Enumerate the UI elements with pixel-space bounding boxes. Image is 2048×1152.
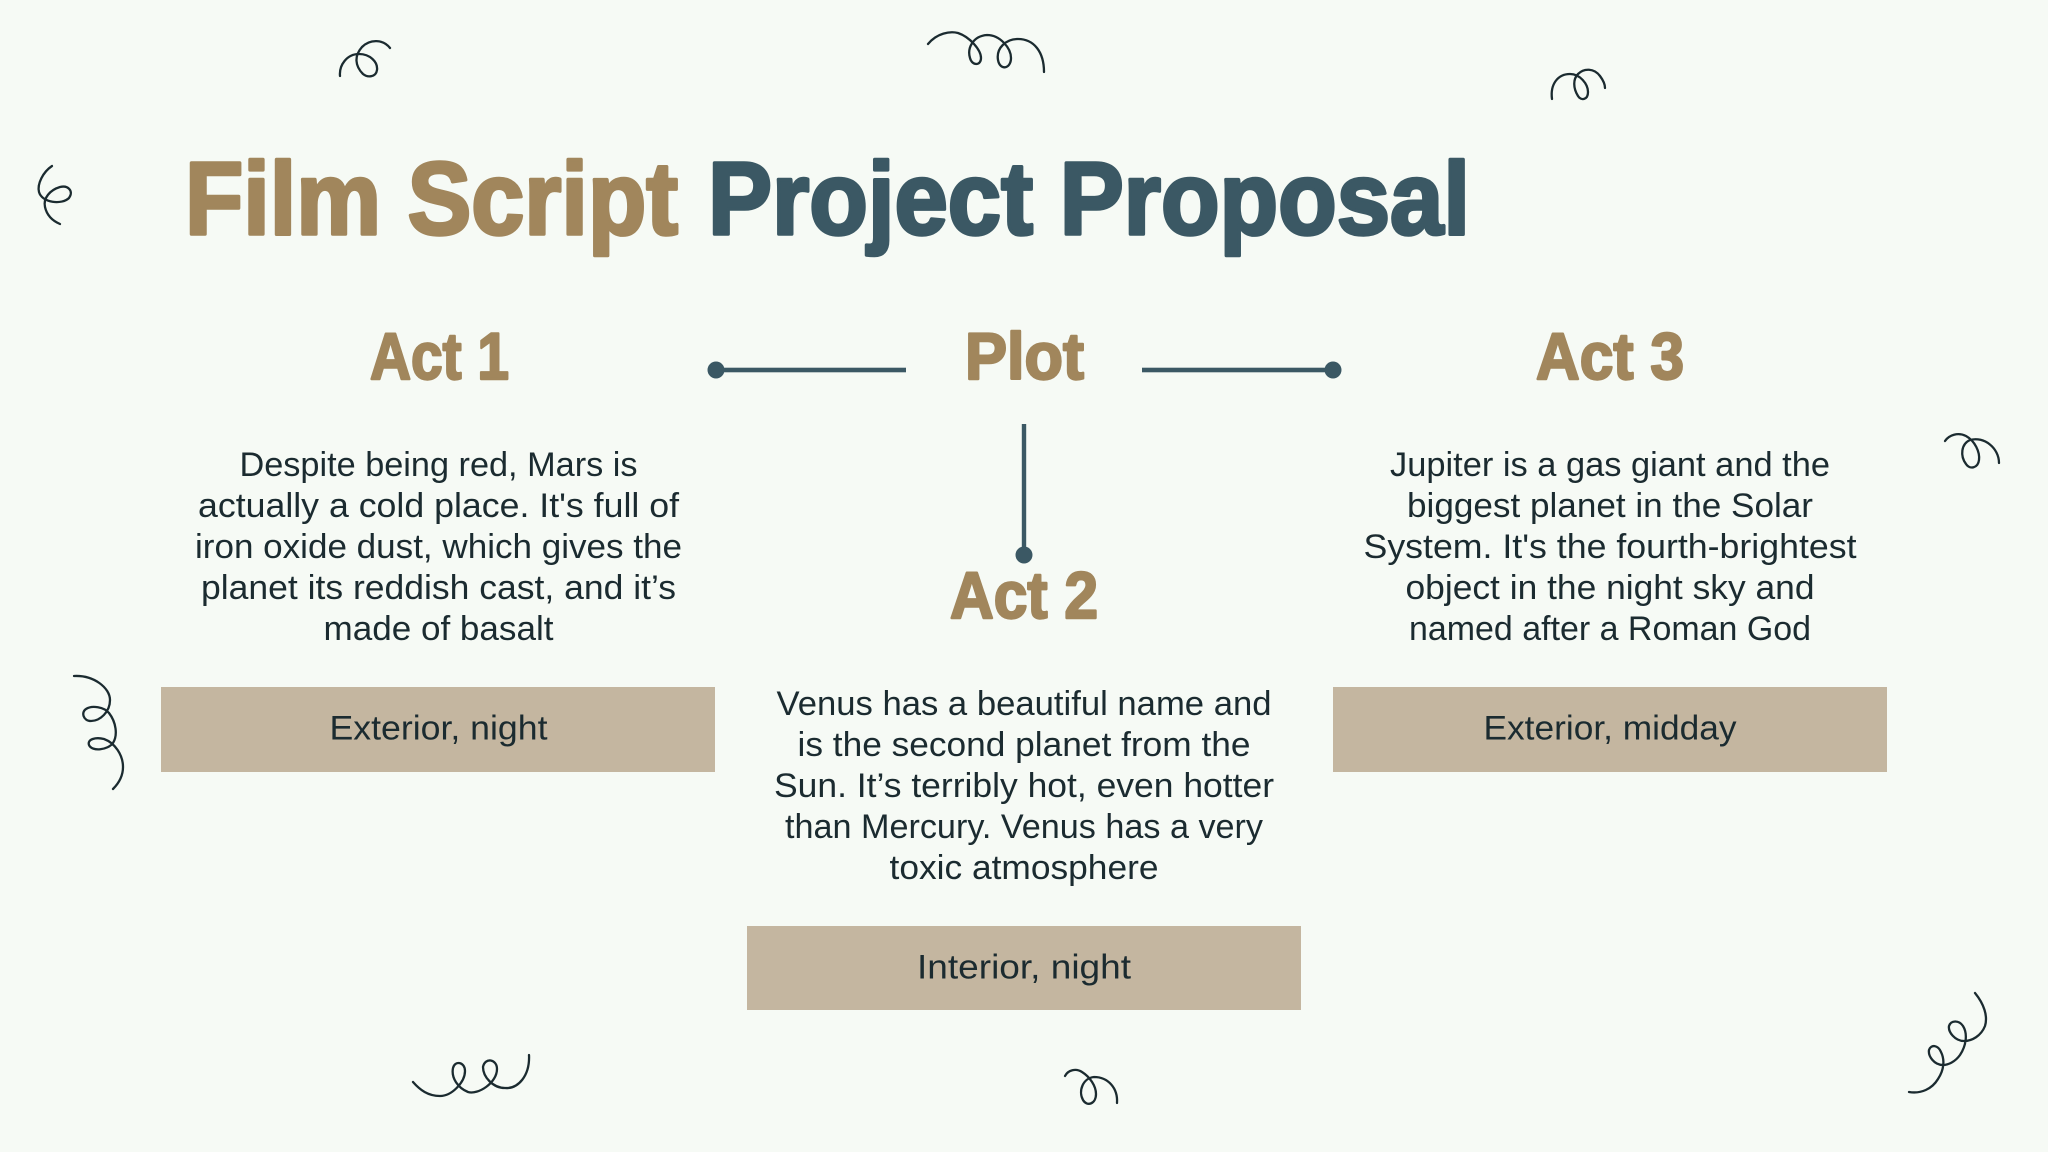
text block: act 3 description: object in the night sky and xyxy=(1406,569,1814,607)
text block: act 2 description: Venus has a beautiful name and xyxy=(776,685,1272,723)
icon: squiggle bottom right xyxy=(1909,993,1986,1092)
text block: act 3 description: System. It's the fourth-brightest xyxy=(1364,528,1857,566)
title xyxy=(185,141,1470,256)
text block: act 1 description: planet its reddish cast, and it’s xyxy=(201,569,676,607)
connector: plot to act 3 xyxy=(1142,362,1342,378)
text block: act 3 description: biggest planet in the Solar xyxy=(1407,487,1813,525)
label box: exterior, night: Exterior, night xyxy=(330,710,548,748)
icon: squiggle top center xyxy=(928,32,1044,72)
title part: Film Script: Film Script xyxy=(185,141,678,256)
text block: act 1 description: actually a cold place. It's full of xyxy=(198,487,680,525)
text block: act 1 description: iron oxide dust, which gives the xyxy=(195,528,682,566)
panel: act 1 xyxy=(161,319,715,772)
label box: exterior, night xyxy=(161,687,715,772)
text block: act 2 description xyxy=(774,685,1274,887)
icon: squiggle top right xyxy=(1552,70,1605,99)
icon: squiggle bottom left xyxy=(413,1055,529,1096)
text block: act 2 description: Sun. It’s terribly hot, even hotter xyxy=(774,767,1274,805)
text block: act 2 description: than Mercury. Venus has a very xyxy=(785,808,1263,846)
text block: act 2 description: is the second planet from the xyxy=(798,726,1250,764)
text block: act 1 description: made of basalt xyxy=(324,610,554,648)
text block: act 1 description xyxy=(195,446,682,648)
heading: Plot: Plot xyxy=(965,319,1084,393)
label box: exterior, midday: Exterior, midday xyxy=(1484,710,1736,748)
label box: exterior, midday xyxy=(1333,687,1887,772)
panel: act 2 xyxy=(747,558,1301,1010)
text block: act 3 description xyxy=(1364,446,1857,648)
text block: act 3 description: named after a Roman God xyxy=(1409,610,1811,648)
text block: act 1 description: Despite being red, Mars is xyxy=(240,446,638,484)
text block: act 3 description: Jupiter is a gas giant and the xyxy=(1390,446,1830,484)
label box: interior, night xyxy=(747,926,1301,1010)
connector: plot to act 1 xyxy=(708,362,906,378)
connector: plot to act 2 xyxy=(1016,424,1032,564)
icon: squiggle left upper xyxy=(39,166,71,224)
icon: squiggle bottom center xyxy=(1065,1070,1117,1104)
title part: Project Proposal: Project Proposal xyxy=(708,141,1470,256)
icon: squiggle left lower xyxy=(74,676,123,789)
panel: act 3 xyxy=(1333,319,1887,772)
icon: squiggle right xyxy=(1945,434,1999,467)
text block: act 2 description: toxic atmosphere xyxy=(890,849,1158,887)
heading: act 2: Act 2 xyxy=(950,558,1098,632)
label box: interior, night: Interior, night xyxy=(917,948,1132,986)
icon: squiggle top left xyxy=(340,41,390,76)
heading: act 3: Act 3 xyxy=(1536,319,1684,393)
heading: act 1: Act 1 xyxy=(370,319,509,393)
